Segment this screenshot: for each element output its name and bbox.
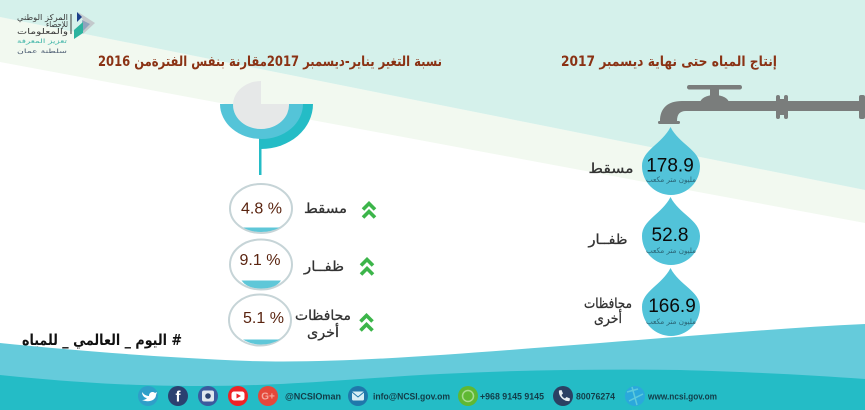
label: Muscat: مسقط — [304, 201, 347, 217]
footer band — [0, 324, 865, 410]
text: toll-free number: 80076274 — [576, 392, 616, 402]
icon: google plus — [258, 386, 278, 406]
logo mark — [74, 12, 95, 39]
icon: water tap — [658, 85, 865, 124]
icon: phone — [553, 386, 573, 406]
label: Dhofar: ظفــار — [587, 232, 628, 248]
label: other governorates: أخرى — [594, 309, 622, 327]
drop: other governorates 166.9 — [642, 268, 700, 336]
label: Muscat: مسقط — [588, 161, 634, 177]
gauge: other governorates 5.1%: 5.1 % — [243, 310, 284, 327]
icon: mail — [348, 386, 368, 406]
drop: Muscat 178.9: 178.9 — [646, 156, 694, 176]
logo text: للإحصاء — [46, 20, 68, 30]
logo text: سلطنة عمان — [17, 48, 67, 55]
logo text: المركز الوطني — [17, 13, 68, 22]
drop: Muscat 178.9: مليون متر مكعب — [646, 175, 696, 184]
drop: other governorates 166.9: مليون متر مكعب — [646, 317, 696, 326]
gauge: Muscat 4.8% — [230, 184, 292, 233]
icon: twitter — [138, 386, 158, 406]
drop: Dhofar 52.8: 52.8 — [652, 225, 688, 246]
icon: goblet pie — [220, 81, 313, 175]
icon: up chevrons — [360, 316, 372, 330]
hashtag: # اليوم _ العالمي _ للمياه — [22, 331, 182, 349]
text: mobile number: +968 9145 9145 — [480, 392, 545, 402]
icon: google plus: G+ — [261, 392, 275, 402]
label: other governorates: أخرى — [307, 323, 339, 341]
logo text: تعزيز المعرفة — [17, 38, 67, 45]
label: Dhofar: ظفــار — [303, 259, 344, 275]
label: other governorates — [295, 308, 351, 341]
gauge: Dhofar 9.1%: 9.1 % — [240, 252, 280, 269]
gauge: other governorates 5.1% — [229, 294, 291, 346]
heading: rate of change: نسبة التغير يناير-ديسمبر 2017مقارنة بنفس الفترةمن 2016 — [98, 54, 442, 70]
drop: Muscat 178.9 — [642, 127, 700, 195]
icon: youtube — [228, 386, 248, 406]
label: other governorates — [584, 296, 632, 327]
logo text: والمعلومات — [17, 27, 68, 36]
gauge: Muscat 4.8%: 4.8 % — [241, 200, 282, 218]
logo text — [17, 13, 72, 55]
icon: facebook: f — [176, 388, 182, 406]
label: other governorates: محافظات — [295, 308, 351, 324]
icon: facebook — [168, 386, 188, 406]
drop: other governorates 166.9: 166.9 — [648, 296, 696, 317]
gauge: Dhofar 9.1% — [230, 240, 292, 290]
icon: up chevrons — [363, 204, 375, 218]
drop: Dhofar 52.8 — [642, 197, 700, 265]
icon: globe — [625, 386, 645, 406]
label: other governorates: محافظات — [584, 296, 632, 312]
logo: NCSI — [17, 12, 95, 55]
icon: whatsapp — [458, 386, 478, 406]
text: social handle: @NCSIOman — [285, 392, 341, 402]
heading: water production: إنتاج المياه حتى نهاية ديسمبر 2017 — [561, 54, 777, 70]
text: website: www.ncsi.gov.om — [647, 392, 717, 402]
drop: Dhofar 52.8: مليون متر مكعب — [646, 246, 696, 255]
icon: up chevrons — [361, 260, 373, 274]
icon: instagram — [198, 386, 218, 406]
text: email: info@NCSI.gov.om — [373, 392, 450, 402]
